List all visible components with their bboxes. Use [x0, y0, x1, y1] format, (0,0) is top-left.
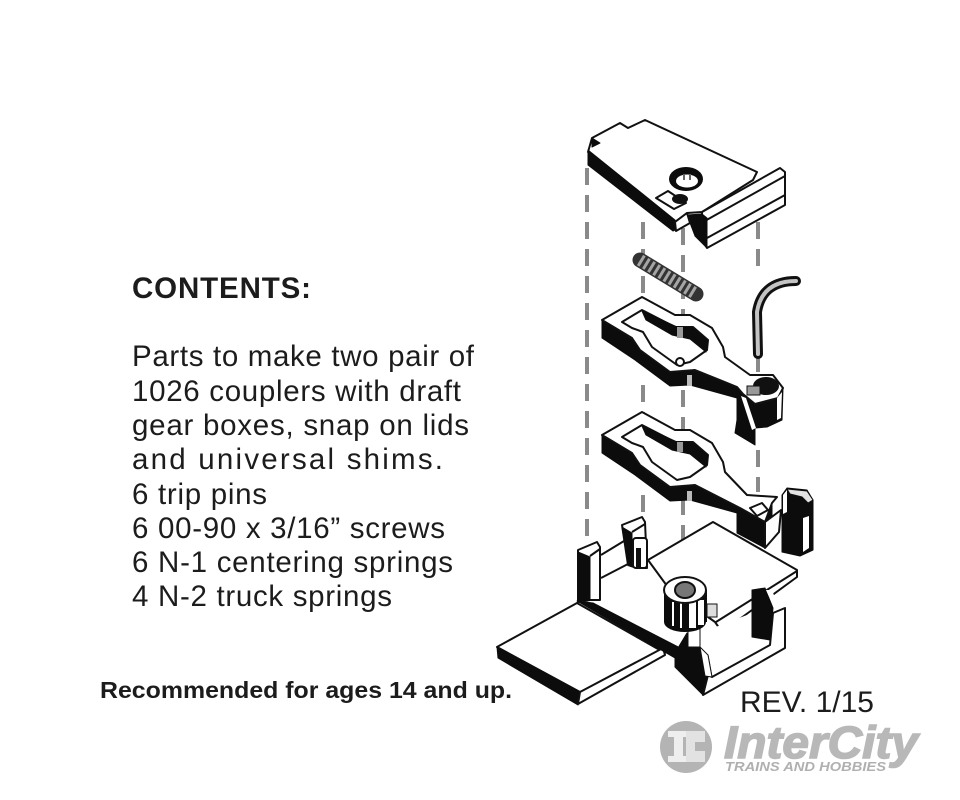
text block: contents list [132, 340, 475, 613]
text block: contents list: 6 trip pins [132, 478, 267, 511]
right post [752, 588, 773, 640]
part: draft gear box base [497, 517, 797, 705]
part: centering spring [640, 260, 696, 294]
text block: contents list: 1026 couplers with draft [132, 375, 461, 408]
age recommendation: Recommended for ages 14 and up. [100, 677, 512, 703]
left post [578, 542, 600, 602]
part: trip pin [757, 281, 796, 354]
text block: contents list: Parts to make two pair of [132, 340, 475, 373]
icon: IC roundel [660, 721, 712, 773]
text block: contents list: 4 N-2 truck springs [132, 580, 392, 613]
part: snap-on lid [588, 120, 785, 248]
front tongue [497, 603, 665, 692]
threaded boss [688, 625, 700, 647]
rear post [622, 517, 647, 568]
dashed alignment lines [587, 168, 758, 560]
black wall [577, 601, 684, 661]
part: upper coupler [602, 297, 783, 445]
text block: contents list: 6 00-90 x 3/16” screws [132, 512, 445, 545]
heading: contents: CONTENTS: [132, 272, 311, 305]
revision label: REV. 1/15 [740, 686, 874, 719]
box floor [600, 562, 700, 650]
part: lower coupler [602, 412, 813, 556]
text block: contents list: gear boxes, snap on lids [132, 409, 469, 442]
text block: contents list: and universal shims. [132, 443, 443, 476]
logo: InterCity Trains and Hobbies: InterCity [724, 717, 920, 768]
logo: InterCity Trains and Hobbies [660, 717, 920, 774]
front box corner [675, 633, 712, 695]
text block: contents list: 6 N-1 centering springs [132, 546, 453, 579]
logo: InterCity Trains and Hobbies: TRAINS AND HOBBIES [725, 760, 887, 774]
rear shim plate [648, 522, 797, 632]
